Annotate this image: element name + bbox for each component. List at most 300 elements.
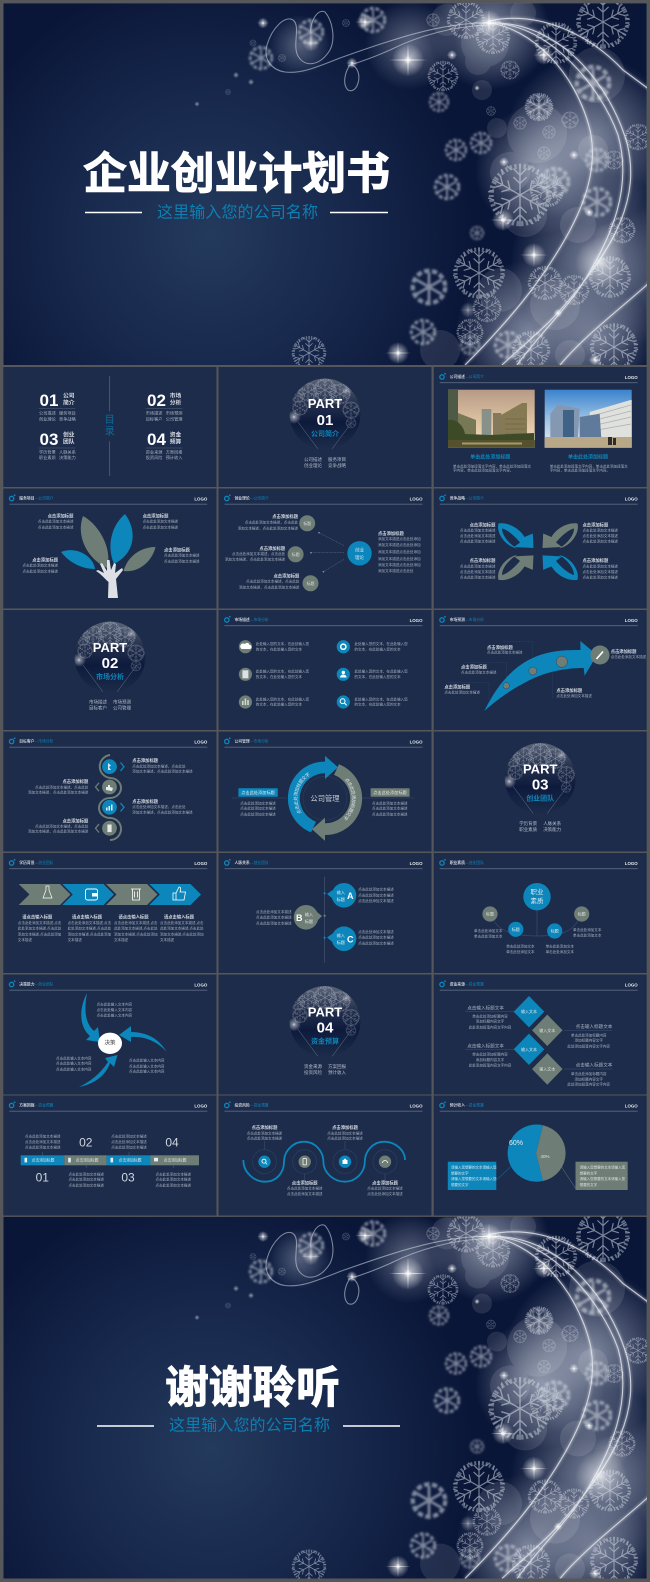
contents item 03 [39,430,76,461]
abc text: 点击此处添加文本描述 [358,887,394,892]
slide header: LOGO [625,861,638,866]
part list: 资金来源 [304,1063,322,1070]
part list: 职业素质 [519,826,538,833]
pie callouts: 想要的文字 [451,1182,469,1187]
qualities text: 单击此处添加文本 [506,949,535,954]
timeline text: 点击此处添加文本描述 [156,1177,191,1182]
part list: 投资风险 [304,1069,322,1076]
forecast labels: 点击添加标题 [487,644,513,651]
part heading [308,1004,342,1046]
contents item 04: 投资风险 [146,454,163,461]
funding text: 单击此处添加标题内容 [472,1013,508,1018]
icon text: 此处输入您的文本，在此处输入您 [354,669,408,674]
qualities tree: 素质 [530,896,544,905]
management labels: 点击此处添加文本描述 [240,800,276,805]
timeline labels: 添加文本描述，点击此处添加文本描述 [28,790,89,795]
decision text: 点击此处输入文本内容 [56,1066,92,1071]
pie callouts: 请输入您想要的文本请输入您 [580,1165,626,1170]
timeline text: 点击此处添加文本描述 [111,1133,147,1138]
slide header: 职业素质—创业团队 [450,860,484,865]
qualities tree [482,883,589,939]
pie callouts: 请输入您想要的文本请输入您 [451,1165,497,1170]
decision text: 点击此处输入文本内容 [97,1001,133,1006]
subtitle: 这里输入您的公司名称 [157,204,318,222]
slide header: 创业理论—公司简介 [234,496,269,500]
qualities text: 单击此处添加文本 [474,928,503,933]
decision text [56,1001,165,1074]
slide header: LOGO [194,1104,208,1109]
chevron process [19,884,201,905]
process text: 此处添加文本描述,点击此处 [114,926,158,931]
qualities tree: 标题 [486,910,494,916]
slide header: LOGO [625,1104,638,1109]
timeline labels: 点击添加标题 [63,818,89,824]
icon text: 的文本，在此处输入您的文本 [354,646,401,651]
slide header [9,859,208,869]
abc bubble diagram: 输入 [337,889,346,896]
contents item 01: 公司 [63,392,75,399]
photo: residential towers at sunset [448,390,535,448]
qualities text: 单击此处添加文本 [506,944,535,949]
timeline numbers [36,1135,179,1185]
icon text: 的文本，在此处输入您的文本 [256,674,302,679]
wave text: 点击此处添加文本描述 [287,1191,323,1196]
photo captions: 字内容，单击此处添加段落文字内容。 [453,468,513,473]
forecast labels: 点击添加标题 [556,687,583,694]
abc text [256,887,394,945]
funding text [467,1004,613,1087]
contents item 02: 市场预测 [166,410,182,416]
slide header [440,373,638,383]
contents item 01: 竞争战略 [59,416,77,422]
tree labels: 点击此处添加文本描述 [38,524,74,529]
diamond chain: 输入文本 [539,1066,555,1072]
management labels [238,788,410,816]
theory text blocks: 点击此处添加文本描述，点击此处 [245,520,298,525]
node diagram: 创业 [355,546,364,554]
process text: 点击此处添加文本描述,点击 [68,920,112,925]
decision text: 点击此处输入文本内容 [56,1061,92,1066]
funding text: 此处添加段落内容文字内容 [567,1082,610,1087]
diamond chain: 输入文本 [521,1008,537,1014]
part list: 市场预测 [113,698,131,706]
slide header [9,494,208,504]
timeline band: 点击添加标题 [32,1157,55,1162]
contents heading [105,415,115,438]
contents item 04: 预计收入 [166,454,183,461]
theory text blocks: 添加文本描述点击此处 [378,568,414,573]
contents item 02: 02 [147,391,166,410]
photo captions [453,454,628,473]
strategy labels: 点击此处添加文本描述 [460,539,496,544]
panel: decision ability [3,974,216,1094]
icon text: 此处输入您的文本，在此处输入您 [256,669,309,674]
funding text: 单击此处添加标题内容 [571,1032,607,1037]
process text: 请点击输入标题 [22,914,53,920]
slide header [224,616,423,626]
theory text blocks [225,513,421,589]
timeline text [25,1133,191,1187]
funding text: 添加标题内容文字 [575,1076,603,1081]
slide header [440,859,638,869]
contents heading: 目 [105,415,115,426]
slide header [440,616,638,626]
timeline numbers: 03 [121,1171,135,1185]
forecast labels [444,644,647,698]
abc bubble diagram [294,877,356,963]
closing title: 谢谢聆听 [165,1364,340,1412]
slide header: 目标客户—市场分析 [19,738,54,744]
slide header [440,1101,638,1111]
part heading: 03 [532,776,549,793]
photo captions: 单击此处添加标题 [568,454,608,461]
slide header: 公司管理—市场分析 [234,738,269,744]
slide header: LOGO [410,618,423,623]
node diagram: 标题 [306,580,314,586]
process text: 点击此处添加文本描述,点击 [160,920,204,925]
icon text: 此处输入您的文本，在此处输入您 [256,696,309,701]
contents heading: 录 [105,426,115,438]
wave diagram [243,1141,405,1182]
theory text blocks: 添加文本描述点击此处添加 [378,536,421,541]
process text: 添加文本描述,点击此处添加 [18,931,62,936]
slide header: 市场预测—市场分析 [450,617,484,622]
slide header: 服务项目—公司简介 [19,496,54,500]
part circle [72,622,146,692]
contents item 03: 创业 [63,430,75,438]
contents item 01: 简介 [63,399,75,407]
strategy labels: 点击此处添加文本描述 [460,574,496,579]
timeline numbers: 01 [36,1170,49,1184]
contents item 03: 团队 [63,438,75,446]
forecast labels: 点击添加标题 [444,684,471,690]
funding text: 点击输入标题文本 [576,1023,613,1030]
slide header: LOGO [410,497,423,502]
panel: personal network [218,853,432,973]
timeline text: 点击此处添加文本描述 [111,1144,147,1149]
tree labels: 点击此处添加文本描述 [143,524,179,529]
contents item 04: 04 [147,430,166,449]
photo captions: 单击此处添加段落文字内容，单击此处添加段落文 [550,463,628,468]
panel: education background [3,853,216,973]
slide header: LOGO [194,740,208,745]
tree labels: 点击此处添加文本描述 [164,558,200,563]
part circle [287,378,360,450]
contents item 02: 分析 [170,399,181,407]
abc text: 点击此处添加文本描述 [256,920,292,925]
slide header: LOGO [625,983,638,988]
qualities text: 单击此处添加文本 [474,934,503,939]
strategy labels [460,522,618,579]
strategy labels: 点击添加标题 [470,557,496,564]
qualities text: 单击此处添加文本 [546,949,574,954]
slide header: LOGO [410,861,423,866]
panel: plan returns [3,1096,216,1216]
timeline labels: 添加文本描述，点击此处添加文本描述 [132,769,193,774]
diamond chain [465,996,612,1085]
theory text blocks: 点击添加标题 [378,530,404,537]
timeline text: 点击此处添加文本描述 [156,1182,191,1187]
timeline labels: 点击添加标题 [63,778,89,785]
timeline labels: 添加文本描述，点击此处添加文本描述 [28,829,89,834]
timeline text: 点击此处添加文本描述 [25,1139,61,1144]
contents item 03: 学历背景 [39,448,56,456]
strategy labels: 点击此处添加文本描述 [460,563,496,568]
theory text blocks: 添加文本描述，点击此处添加文本描述 [225,557,286,562]
qualities text: 单击此处添加文本 [573,927,602,932]
timeline text: 点击此处添加文本描述 [68,1171,104,1176]
timeline band [21,1152,199,1168]
part circle [287,986,360,1057]
part list [89,698,131,712]
management labels: 点击此处添加文本描述 [240,806,276,811]
pie callouts: 请输入您想要的文本请输入您 [451,1176,497,1181]
abc bubble diagram: 标题 [305,918,314,925]
process text: 文本描述 [160,937,175,942]
cover background with snowflakes and light arcs [4,0,650,410]
icon text: 此处输入您的文本，在此处输入您 [256,641,309,646]
process text: 点击此处添加文本描述,点击 [114,920,158,925]
timeline numbers: 04 [165,1135,179,1149]
icon text: 的文本，在此处输入您的文本 [256,702,302,707]
theory text blocks: 添加文本描述，点击此处添加文本描述 [238,525,298,530]
qualities tree: 标题 [512,926,520,932]
qualities text: 单击此处添加文本 [546,944,574,949]
circular arrows [232,756,414,841]
process text: 此处添加文本描述,点击此处 [18,926,62,931]
strategy labels: 点击此处添加文本描述 [582,527,618,532]
contents item 02: 公司管理 [166,416,183,422]
slide header: 公司描述—公司简介 [450,374,484,379]
tree labels: 点击添加标题 [164,546,190,554]
icon text: 的文本，在此处输入您的文本 [354,702,401,707]
slide header: LOGO [410,1104,423,1109]
part heading: 04 [317,1019,334,1036]
panel: target customers [3,732,216,852]
pie callouts: 想要的文字 [580,1170,598,1175]
part list: 创业理论 [304,462,322,469]
part list: 方案回报 [328,1063,346,1070]
panel: market description [218,610,432,730]
pie chart: 40% [540,1154,550,1159]
wave text: 点击此处添加文本描述 [247,1136,283,1141]
closing background with snowflakes and light arcs [4,1184,650,1582]
timeline band: 点击添加标题 [76,1157,99,1162]
process text: 文本描述 [114,937,129,942]
decision text: 点击此处输入文本内容 [97,1012,133,1017]
panel: part 03 [434,732,647,852]
panel: professional qualities [434,853,647,973]
process text: 请点击输入标题 [164,914,195,920]
part heading: 资金预算 [311,1037,339,1046]
panel: part 04 [218,974,432,1094]
contents item 03: 决策能力 [59,454,76,461]
panel: contents slide [3,367,216,487]
strategy labels: 点击此处添加文本描述 [460,533,496,538]
part list: 公司管理 [113,704,131,712]
slide header: 竞争战略—公司简介 [450,496,484,500]
tree labels: 点击此处添加文本描述 [164,553,200,558]
process text: 请点击输入标题 [118,914,149,920]
theory text blocks: 添加文本描述点击此处添加 [378,549,421,554]
contents item 04: 预算 [170,438,181,446]
swirl arrows to decision: 决策 [104,1038,116,1046]
process text: 此处添加文本描述,点击此处 [68,926,112,931]
forecast labels: 点击添加标题 [611,648,637,655]
part list: 学历背景 [519,820,538,827]
part list: 竞争战略 [328,462,346,469]
contents item 03: 人脉关系 [59,448,76,456]
tree labels: 点击添加标题 [143,512,169,520]
panel: cover slide [4,0,650,410]
icon text: 此处输入您的文本，在此处输入您 [354,641,408,646]
tree labels [23,512,200,573]
theory text blocks: 点击添加标题 [274,572,300,580]
contents item 04: 方案回报 [166,448,183,456]
strategy labels: 点击此处添加文本描述 [582,574,618,579]
pie chart [496,1124,576,1188]
abc text: 点击此处添加文本描述 [358,892,394,897]
diamond chain: 输入文本 [521,1046,537,1052]
management labels: 点击此处添加标题 [373,789,408,796]
qualities tree: 标题 [551,928,559,934]
pie chart: 60% [509,1140,523,1147]
timeline labels [28,757,193,834]
management labels: 点击此处添加文本描述 [372,811,408,816]
slide header: LOGO [194,497,208,502]
funding text: 单击此处添加标题内容 [571,1071,607,1076]
circular arrows: 点击此处添加标题文字 [344,778,356,820]
slide header [9,980,208,990]
strategy labels: 点击此处添加文本描述 [582,539,618,544]
management labels: 点击此处添加文本描述 [240,811,276,816]
contents item 04: 资金来源 [146,448,163,456]
funding text: 此处添加段落内容文字内容 [469,1025,512,1030]
theory text blocks: 点击此处添加文本描述，点击此处 [246,579,300,584]
icon text [256,641,408,707]
theory text blocks: 添加文本描述点击此处添加 [378,562,421,567]
s-curve timeline [96,755,124,840]
timeline text: 点击此处添加文本描述 [25,1133,61,1138]
process text: 文本描述 [18,937,32,942]
theory text blocks: 点击添加标题 [259,545,286,552]
qualities tree: 标题 [578,910,586,916]
theory text blocks: 点击添加标题 [272,513,299,520]
funding text: 点击输入标题文本 [467,1004,504,1012]
panel: expected income [434,1096,647,1216]
part list: 预计收入 [328,1069,346,1076]
panel: startup theory [218,488,432,608]
theory text blocks: 添加文本描述点击此处添加 [378,542,421,547]
timeline text: 点击此处添加文本描述 [68,1177,104,1182]
subtitle rules [85,212,388,214]
slide header [224,737,423,747]
management labels: 点击此处添加标题 [241,789,276,796]
qualities text [474,927,602,954]
timeline labels: 点击此处添加文本描述，点击此处 [132,804,186,809]
wave text: 点击此处添加文本描述 [327,1136,363,1141]
strategy labels: 点击添加标题 [582,557,609,564]
panel: funding sources [434,974,647,1094]
funding text: 点击输入标题文本 [467,1042,504,1050]
timeline labels: 点击添加标题 [132,757,159,764]
abc bubble diagram: 输入 [337,932,346,939]
pie callouts: 请输入您想要的文本请输入您 [580,1176,626,1181]
diamond chain: 输入文本 [539,1027,555,1033]
forecast labels: 点击此处添加文本描述 [444,689,480,694]
abc text: 点击此处添加文本描述 [358,940,394,945]
slide header: LOGO [625,618,638,623]
part list [519,820,562,833]
node diagram: 理论 [355,554,364,561]
process text: 请点击输入标题 [72,914,103,920]
part heading: 市场分析 [96,672,124,681]
slide header: LOGO [410,740,423,745]
slide header [440,980,638,990]
process text: 文本描述 [68,937,82,942]
tree graphic [61,514,156,598]
node diagram: 标题 [292,551,300,557]
slide header: 决策能力—创业团队 [19,982,54,986]
panel: part 01 [218,367,432,487]
process text [18,914,204,942]
timeline numbers: 02 [79,1135,93,1149]
part list: 目标客户 [89,704,107,712]
funding text: 添加标题内容文字 [575,1038,603,1043]
funding text: 添加标题内容文字 [476,1019,505,1024]
contents item 04: 资金 [170,430,181,438]
part list: 人脉关系 [543,820,562,827]
panel: company description [434,367,647,487]
funding text: 单击此处添加标题内容 [472,1052,508,1057]
timeline labels: 点击此处添加文本描述，点击此处 [132,763,186,768]
tree labels: 点击此处添加文本描述 [23,568,58,573]
part list [304,1063,346,1076]
wave text: 点击添加标题 [292,1180,318,1186]
pie callouts [448,1162,628,1190]
icon text: 的文本，在此处输入您的文本 [256,646,302,651]
wave text: 点击添加标题 [332,1124,359,1131]
funding text: 添加标题内容文字 [476,1057,505,1062]
part heading: 公司简介 [311,429,339,438]
decision text: 点击此处输入文本内容 [129,1058,165,1063]
strategy labels: 点击此处添加文本描述 [582,533,618,538]
slide header [9,737,208,747]
strategy labels: 点击此处添加文本描述 [460,527,496,532]
part heading [93,640,127,681]
theory text blocks: 添加文本描述，点击此处添加文本描述 [239,584,300,589]
qualities text: 单击此处添加文本 [573,932,602,937]
slide header [440,494,638,504]
panel: closing slide [4,1184,650,1582]
process text: 添加文本描述,点击此处添加 [160,931,204,936]
process text: 点击此处添加文本描述,点击 [18,920,62,925]
photo captions: 单击此处添加标题 [470,454,510,461]
funding text: 此处添加段落内容文字内容 [567,1044,610,1049]
process text: 此处添加文本描述,点击此处 [160,926,204,931]
photo: glass office building [545,390,632,448]
wave text: 点击此处添加文本描述 [367,1191,403,1196]
node diagram: 标题 [303,520,311,526]
panel: services tree [3,488,216,608]
slide header [224,859,423,869]
slide header: 学历背景—创业团队 [19,860,54,865]
pie callouts: 想要的文字 [451,1170,469,1175]
four converging arrows [498,523,578,580]
circular arrows: 公司管理 [310,794,340,803]
contents item 03: 03 [40,430,58,449]
timeline labels: 点击此处添加文本描述，点击此处 [35,784,89,789]
